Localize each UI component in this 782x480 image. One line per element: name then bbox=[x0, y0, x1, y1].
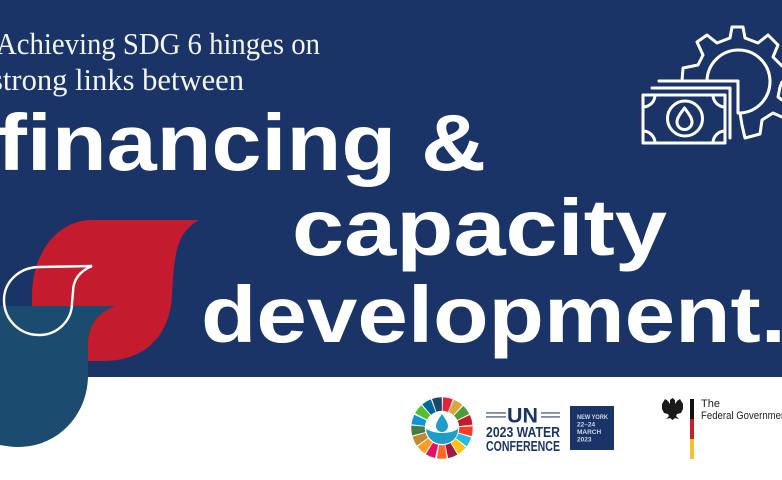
main heading: development. bbox=[201, 270, 782, 359]
date text: 2023 bbox=[577, 436, 592, 444]
date text: NEW YORK bbox=[577, 414, 608, 421]
conference wordmark: UN bbox=[507, 404, 538, 428]
government name: The bbox=[701, 398, 720, 410]
decorative drops bbox=[0, 220, 199, 447]
gear hub on the edge bbox=[778, 82, 782, 100]
date text: MARCH bbox=[577, 429, 601, 436]
banknote water drop bbox=[677, 108, 692, 130]
banknote corners bbox=[643, 95, 725, 143]
wheel water drop and bowl bbox=[426, 414, 458, 444]
main heading bbox=[0, 98, 782, 359]
intro text: Achieving SDG 6 hinges on bbox=[0, 26, 320, 61]
banknote back lines bbox=[652, 81, 738, 138]
intro text bbox=[0, 26, 320, 97]
SDG wheel bbox=[408, 394, 476, 462]
date box bbox=[570, 406, 614, 450]
gear inner circle bbox=[707, 50, 770, 113]
front banknote bbox=[643, 95, 725, 143]
date text bbox=[577, 414, 608, 444]
date text: 22–24 bbox=[577, 422, 595, 428]
flag stripe bbox=[690, 399, 694, 459]
teal drop bbox=[0, 306, 116, 447]
UN 2023 Water Conference logo bbox=[408, 394, 614, 462]
German Federal Government logo bbox=[662, 398, 782, 459]
main heading: financing & bbox=[0, 98, 486, 187]
conference wordmark bbox=[486, 404, 560, 455]
outline drop bbox=[4, 266, 92, 335]
conference wordmark: 2023 WATER bbox=[486, 425, 560, 441]
conference wordmark: CONFERENCE bbox=[486, 439, 560, 455]
main heading: capacity bbox=[292, 183, 668, 272]
gear outline bbox=[682, 27, 782, 138]
banknote circle bbox=[668, 101, 702, 136]
government name bbox=[701, 398, 782, 422]
navy banner background bbox=[0, 0, 782, 377]
icon: gear and banknotes bbox=[643, 27, 782, 143]
red drop bbox=[32, 220, 199, 361]
icon: federal eagle bbox=[662, 398, 683, 420]
